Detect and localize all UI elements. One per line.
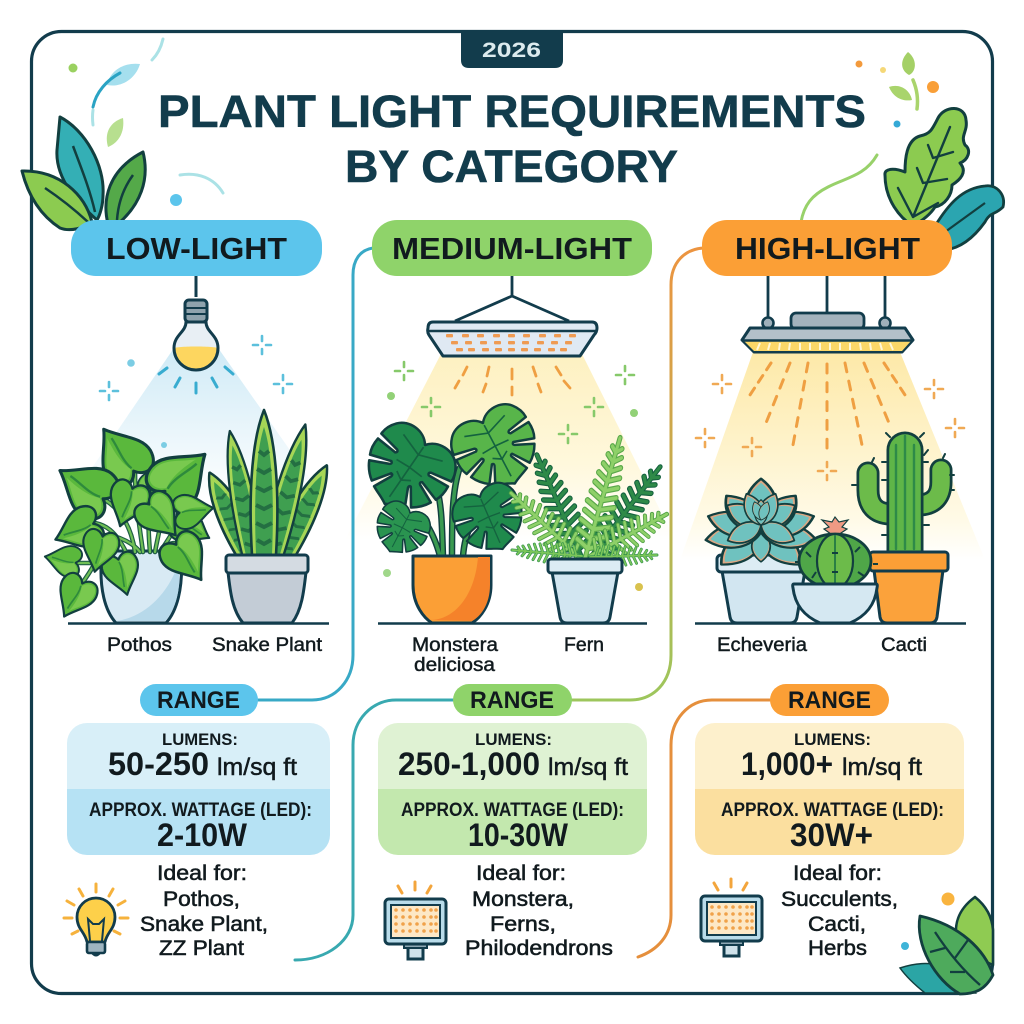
icon: medium grow panel bbox=[428, 276, 597, 395]
panel: low range values: 2-10W bbox=[157, 817, 248, 853]
ideal for: low: ZZ Plant bbox=[159, 937, 244, 960]
panel: medium range values: lm/sq ft bbox=[548, 754, 628, 781]
icon: high grow lamp bbox=[742, 276, 913, 448]
connector: medium range to ideal-for bbox=[295, 700, 453, 960]
ideal for: medium bbox=[465, 862, 613, 960]
panel: medium range values bbox=[378, 723, 647, 855]
title: PLANT LIGHT REQUIREMENTS bbox=[158, 86, 866, 137]
panel: high range values: 30W+ bbox=[790, 817, 873, 853]
heading pill: low-light bbox=[71, 220, 322, 276]
plant: round cactus in bowl bbox=[793, 517, 878, 623]
decoration: top right leaves bbox=[801, 52, 1004, 250]
panel: high range values bbox=[695, 723, 964, 855]
connector: medium to high bbox=[571, 248, 704, 700]
plant: fern bbox=[501, 434, 674, 623]
icon: high LED panel bbox=[701, 879, 762, 956]
panel: medium range values: APPROX. WATTAGE (LED): bbox=[401, 800, 624, 821]
plant: snake plant bbox=[197, 410, 339, 623]
title bbox=[158, 86, 866, 192]
panel: low range values: LUMENS: bbox=[162, 730, 238, 749]
icon: medium LED panel bbox=[385, 882, 446, 959]
connector: low to medium bbox=[258, 248, 373, 700]
range pill: medium bbox=[453, 684, 572, 716]
plant label: Fern: Fern bbox=[564, 635, 604, 656]
ideal for: low bbox=[140, 862, 268, 960]
heading pill: medium-light: MEDIUM-LIGHT bbox=[392, 231, 632, 266]
range pill: medium: RANGE bbox=[470, 687, 554, 714]
ideal for: low: Snake Plant, bbox=[140, 913, 268, 936]
ideal for: high: Succulents, bbox=[781, 888, 898, 911]
sparkles: low bbox=[100, 336, 292, 448]
ideal for: low: Pothos, bbox=[163, 888, 240, 911]
title: BY CATEGORY bbox=[345, 141, 678, 192]
plant label: Snake Plant: Snake Plant bbox=[212, 635, 323, 656]
plant label: Pothos: Pothos bbox=[107, 635, 172, 656]
panel: low range values: 50-250 bbox=[108, 746, 209, 782]
year tab bbox=[461, 31, 563, 68]
ideal for: high: Herbs bbox=[808, 937, 867, 960]
ideal for: medium: Ferns, bbox=[490, 913, 556, 936]
panel: medium range values: 10-30W bbox=[468, 817, 569, 853]
ideal for: medium: Monstera, bbox=[472, 888, 574, 911]
panel: high range values: lm/sq ft bbox=[842, 754, 922, 781]
ideal for: high bbox=[781, 862, 898, 960]
plant: tall cactus bbox=[852, 433, 954, 623]
decoration: top left leaves bbox=[22, 39, 223, 230]
range pill: low bbox=[140, 684, 258, 716]
ideal for: low: Ideal for: bbox=[157, 862, 247, 885]
panel: medium range values: 250-1,000 bbox=[398, 746, 540, 782]
decoration: bottom right leaves bbox=[900, 892, 993, 994]
icon: hanging bulb bbox=[159, 276, 233, 393]
panel: medium range values: LUMENS: bbox=[475, 730, 552, 749]
shelf: high bbox=[695, 622, 966, 625]
plant: pothos bbox=[42, 414, 223, 626]
plant label: Monstera deliciosa: deliciosa bbox=[414, 655, 495, 676]
shelf: low bbox=[68, 622, 329, 625]
light cone: high bbox=[680, 352, 985, 560]
panel: low range values: lm/sq ft bbox=[217, 754, 297, 781]
shelf: medium bbox=[378, 622, 647, 625]
heading pill: medium-light bbox=[372, 220, 652, 276]
panel: high range values: APPROX. WATTAGE (LED): bbox=[721, 800, 944, 821]
plant label: Cacti: Cacti bbox=[881, 635, 927, 656]
range pill: low: RANGE bbox=[157, 687, 240, 714]
plant label: Monstera deliciosa: Monstera bbox=[412, 635, 498, 656]
icon: light bulb bbox=[64, 884, 128, 956]
range pill: high bbox=[770, 684, 889, 716]
panel: low range values: APPROX. WATTAGE (LED): bbox=[89, 800, 312, 821]
heading pill: high-light: HIGH-LIGHT bbox=[735, 231, 920, 266]
light cone: low bbox=[70, 345, 325, 500]
ideal for: high: Ideal for: bbox=[793, 862, 882, 885]
panel: high range values: LUMENS: bbox=[794, 730, 871, 749]
range pill: high: RANGE bbox=[788, 687, 871, 714]
light cone: medium bbox=[345, 350, 675, 540]
heading pill: low-light: LOW-LIGHT bbox=[106, 231, 287, 266]
ideal for: medium: Philodendrons bbox=[465, 937, 613, 960]
sparkles: medium bbox=[383, 362, 643, 591]
panel: high range values: 1,000+ bbox=[741, 746, 833, 782]
sparkles: high bbox=[696, 375, 964, 480]
plant: echeveria bbox=[703, 479, 819, 623]
plant label: Echeveria: Echeveria bbox=[717, 635, 807, 656]
connector: high range to ideal-for bbox=[638, 700, 770, 957]
ideal for: high: Cacti, bbox=[808, 913, 866, 936]
year tab: 2026 bbox=[482, 39, 541, 62]
plant label: Monstera deliciosa bbox=[412, 635, 498, 676]
ideal for: medium: Ideal for: bbox=[476, 862, 566, 885]
panel: low range values bbox=[67, 723, 330, 855]
heading pill: high-light bbox=[702, 220, 952, 276]
plant: monstera bbox=[349, 396, 551, 623]
